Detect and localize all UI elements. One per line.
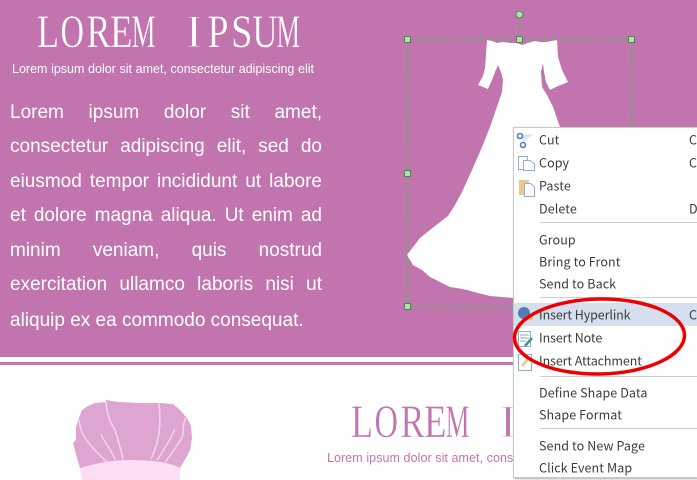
title: M: [132, 6, 156, 58]
selection outline: [408, 15, 632, 306]
section two title: O: [374, 396, 398, 448]
body paragraph: Lorem ipsum dolor sit amet,: [10, 102, 322, 123]
title: U: [252, 6, 278, 58]
menu item: Define Shape Data: Define Shape Data: [539, 382, 648, 402]
subtitle: Lorem ipsum dolor sit amet, consectetur adipiscing elit: [12, 62, 314, 76]
body paragraph: et dolore magna aliqua. Ut enim ad: [10, 205, 322, 226]
menu icons: [516, 132, 535, 371]
menu item: Cut: Cut: [539, 130, 559, 148]
section two title: E: [424, 396, 446, 448]
icon: white dress: [407, 40, 600, 298]
menu item: Insert Note: Insert Note: [539, 328, 602, 346]
menu item: Delete: Delete: [539, 198, 577, 218]
title: [37, 6, 300, 58]
icon: hyperlink globe: [518, 307, 533, 320]
highlighted row: [514, 303, 697, 326]
body paragraph: consectetur adipiscing elit, sed do: [10, 136, 322, 157]
icon: scissors: [518, 134, 533, 148]
body paragraph: minim veniam, quis nostrud: [10, 240, 322, 261]
menu item: Insert Attachment: Insert Attachment: [539, 350, 642, 370]
body paragraph: eiusmod tempor incididunt ut labore: [10, 171, 322, 192]
title: R: [86, 6, 111, 58]
icon: note: [518, 332, 532, 346]
menu item: Send to Back: Send to Back: [539, 274, 616, 292]
section two title: L: [351, 396, 373, 448]
title: I: [184, 6, 204, 58]
menu item: Insert Hyperlink: Insert Hyperlink: [539, 304, 630, 324]
icon: paste: [519, 180, 534, 196]
shortcut: Insert Hyperlink: C: [689, 304, 697, 324]
title: S: [231, 6, 252, 58]
title: P: [208, 6, 228, 58]
body paragraph: [10, 102, 322, 331]
title: L: [37, 6, 59, 58]
shortcut: Copy: C: [689, 152, 697, 172]
menu item: Bring to Front: Bring to Front: [539, 252, 621, 270]
menu item: Send to New Page: Send to New Page: [539, 436, 645, 454]
icon: attachment: [518, 354, 532, 370]
section two title: [351, 396, 513, 448]
menu item: Click Event Map: Click Event Map: [539, 458, 632, 476]
divider band: [0, 362, 697, 365]
menu item: Group: Group: [539, 230, 576, 248]
section two title: R: [400, 396, 425, 448]
menu item: Copy: Copy: [539, 152, 569, 172]
title: E: [110, 6, 132, 58]
title: O: [60, 6, 84, 58]
icon: copy: [518, 156, 534, 170]
panel: purple top section: [0, 0, 697, 357]
shortcut: Cut: C: [689, 130, 697, 148]
menu item: Shape Format: Shape Format: [539, 404, 622, 424]
body paragraph: exercitation ullamco laboris nisi ut: [10, 274, 322, 295]
section two subtitle: Lorem ipsum dolor sit amet, cons: [327, 451, 513, 465]
section two title: M: [446, 396, 470, 448]
menu item: Paste: Paste: [539, 176, 571, 194]
body paragraph: aliquip ex ea commodo consequat.: [10, 310, 304, 331]
chef hat icon: [73, 400, 192, 480]
context menu: [513, 127, 697, 478]
selection handles: [404, 11, 634, 310]
title: M: [276, 6, 300, 58]
